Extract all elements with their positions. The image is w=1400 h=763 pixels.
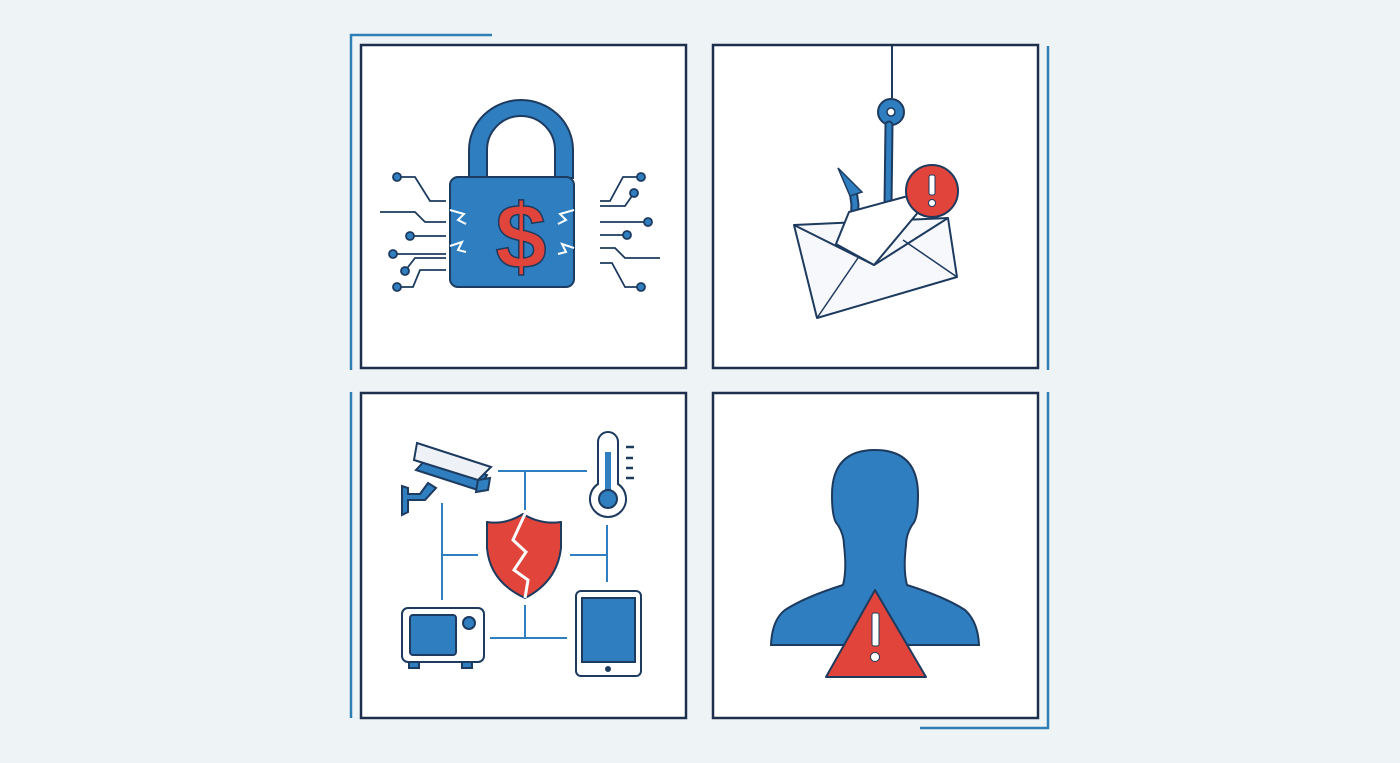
icon: person silhouette [771,450,979,645]
panel: ransomware [361,45,686,368]
icon: thermometer [590,432,634,517]
panel: phishing [713,45,1038,368]
icon: alert badge [906,165,958,217]
icon: circuit lines [380,173,660,291]
icon: fishing line and hook [838,46,904,230]
icon: padlock with dollar [450,100,574,288]
icon: TV [402,608,484,668]
panel: IoT devices [361,393,686,718]
icon: padlock with dollar: $ [495,186,547,288]
network lines [442,471,607,638]
icon: envelope [794,196,957,318]
icon: broken shield [487,514,561,598]
icon: security camera [402,443,491,515]
icon: warning triangle [826,590,926,677]
icon: tablet [576,591,641,676]
panel: identity threat [713,393,1038,718]
